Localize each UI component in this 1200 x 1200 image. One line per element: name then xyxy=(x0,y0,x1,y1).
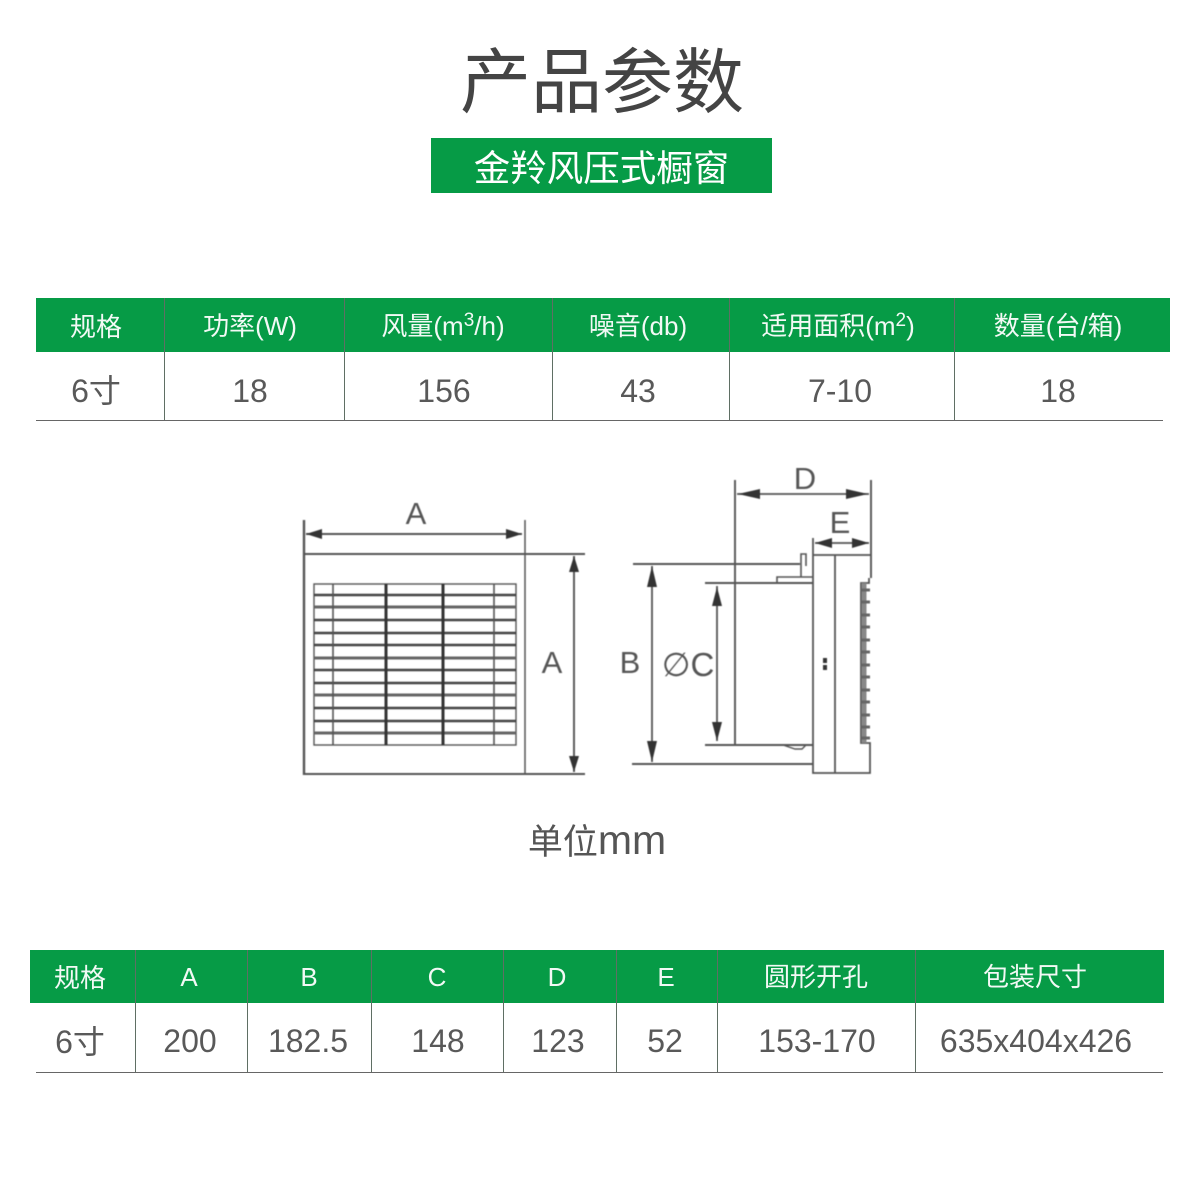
header: C: C xyxy=(428,962,446,992)
value: 43: 43 xyxy=(620,373,656,409)
header: 功率: 功率(W) xyxy=(203,311,297,341)
title: 产品参数 xyxy=(460,44,744,123)
header: 规格: 规格 xyxy=(70,312,122,342)
spec table: dimensions xyxy=(30,950,1164,1073)
header: 规格: 规格 xyxy=(54,963,106,993)
label: diameter C: ∅C xyxy=(662,646,714,683)
header: D: D xyxy=(548,962,566,992)
value: 148: 148 xyxy=(411,1023,465,1059)
front view arrows xyxy=(306,529,579,772)
side view arrows xyxy=(647,489,869,762)
unit note: 单位mm xyxy=(528,817,666,863)
value: 6寸: 6寸 xyxy=(71,373,121,409)
label: E: E xyxy=(830,505,850,540)
value: 156: 156 xyxy=(417,373,471,409)
header: 圆形开孔: 圆形开孔 xyxy=(764,962,868,992)
header: 包装尺寸: 包装尺寸 xyxy=(983,962,1087,992)
header: 噪音: 噪音(db) xyxy=(589,311,687,341)
value: 7-10: 7-10 xyxy=(808,373,872,409)
value: 18: 18 xyxy=(232,373,268,409)
label: height A: A xyxy=(542,645,563,680)
label: width A: A xyxy=(406,496,427,531)
header: 适用面积: 适用面积(m2) xyxy=(761,310,915,341)
header: A: A xyxy=(180,962,198,992)
value: 153-170: 153-170 xyxy=(758,1023,876,1059)
value: 6寸: 6寸 xyxy=(55,1024,105,1060)
label: D: D xyxy=(794,461,816,496)
label: B: B xyxy=(620,645,640,680)
value: 200: 200 xyxy=(163,1023,217,1059)
front view drawing xyxy=(304,520,585,775)
header bar xyxy=(30,950,1164,1003)
value: 123: 123 xyxy=(531,1023,585,1059)
value: 18: 18 xyxy=(1040,373,1076,409)
header bar xyxy=(36,298,1170,352)
header: E: E xyxy=(657,962,675,992)
header: 数量: 数量(台/箱) xyxy=(994,311,1122,341)
header: 风量: 风量(m3/h) xyxy=(381,310,505,341)
value: package size: 635x404x426 xyxy=(940,1023,1132,1059)
side view drawing xyxy=(632,480,871,773)
header: B: B xyxy=(300,962,318,992)
spec table: performance xyxy=(36,298,1170,421)
value: 52: 52 xyxy=(647,1023,683,1059)
value: 182.5: 182.5 xyxy=(268,1023,348,1059)
subtitle banner: 金羚风压式橱窗 xyxy=(474,148,729,189)
subtitle banner xyxy=(431,138,772,193)
